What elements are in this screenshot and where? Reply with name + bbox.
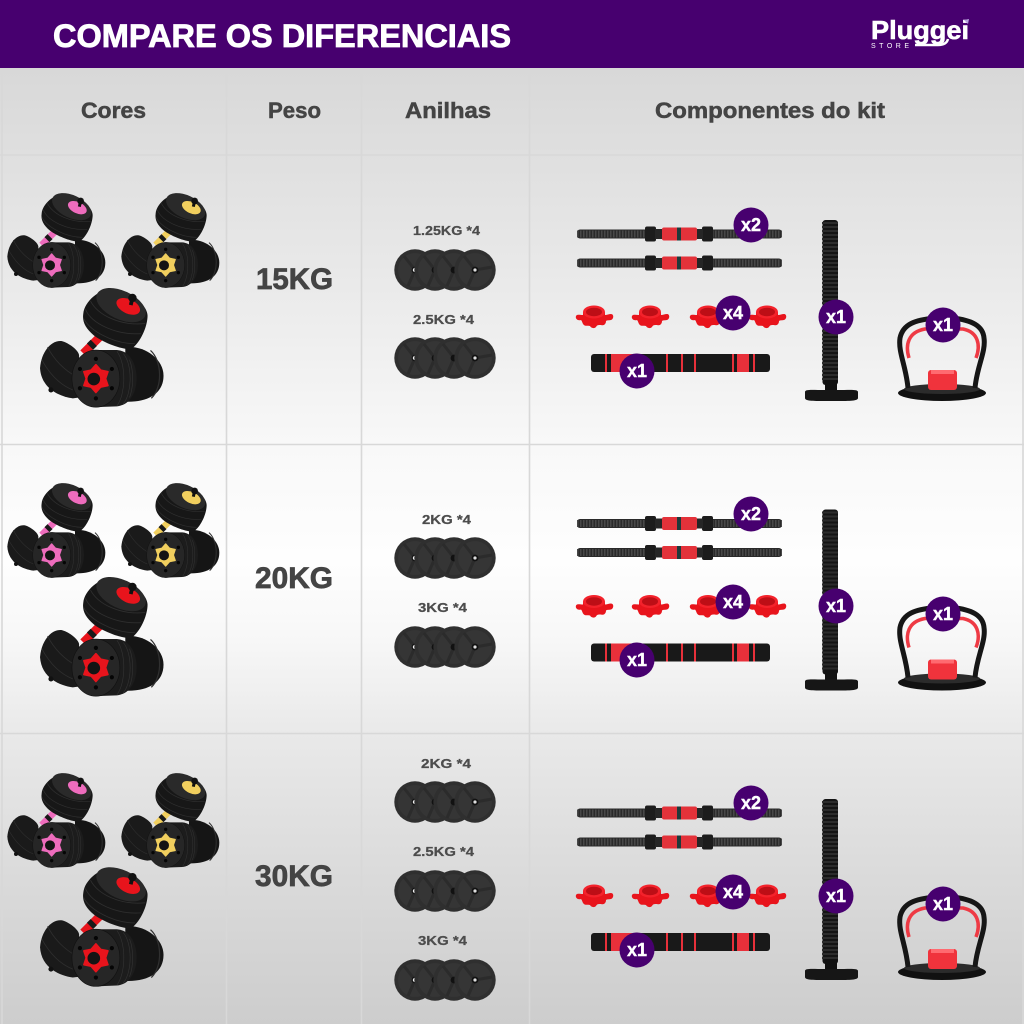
weight 30KG: 30KG bbox=[255, 860, 333, 893]
weight 15KG: 15KG bbox=[256, 263, 333, 296]
label 2KG: 2KG *4 bbox=[421, 756, 472, 771]
badge x2: x2 bbox=[741, 793, 761, 813]
label 2KG: 2KG *4 bbox=[422, 512, 472, 527]
badge x1 kettlebell bbox=[926, 308, 960, 342]
badge x1 pole bbox=[818, 300, 854, 334]
badge x2: x2 bbox=[741, 504, 761, 524]
dumbbell colours 15KG bbox=[7, 188, 219, 407]
badge x4 bbox=[716, 874, 750, 910]
badge x1 kettlebell: x1 bbox=[933, 604, 953, 624]
heading: Anilhas: Anilhas bbox=[405, 98, 491, 123]
dumbbell colours 20KG bbox=[7, 478, 219, 696]
badge x4: x4 bbox=[723, 303, 743, 323]
badge x2 bbox=[734, 208, 768, 242]
badge x4 bbox=[716, 296, 750, 330]
dumbbell colours 30KG bbox=[7, 768, 219, 986]
label 2.5KG: 2.5KG *4 bbox=[413, 312, 475, 327]
title: COMPARE OS DIFERENCIAIS bbox=[53, 18, 511, 54]
label 3KG: 3KG *4 bbox=[418, 933, 468, 948]
badge x1 handle: x1 bbox=[627, 940, 647, 960]
weight 20KG: 20KG bbox=[255, 562, 333, 595]
badge x1 pole bbox=[818, 878, 854, 914]
badge x1 kettlebell: x1 bbox=[933, 894, 953, 914]
plates 30KG bbox=[394, 756, 496, 1001]
badge x1 handle bbox=[620, 354, 654, 388]
logo: Pluggei Store: Pluggei bbox=[871, 15, 969, 45]
label 1.25KG: 1.25KG *4 bbox=[413, 223, 481, 238]
label 3KG: 3KG *4 bbox=[418, 600, 468, 615]
badge x1 handle: x1 bbox=[627, 361, 647, 381]
badge x4: x4 bbox=[723, 592, 743, 612]
column headings bbox=[81, 98, 886, 123]
badge x1 pole: x1 bbox=[826, 886, 846, 906]
badge x1 pole: x1 bbox=[826, 307, 846, 327]
logo: Pluggei Store: STORE bbox=[871, 43, 911, 50]
badge x1 kettlebell bbox=[926, 886, 960, 922]
badge x4: x4 bbox=[723, 882, 743, 902]
kit components 30KG bbox=[576, 786, 986, 980]
badge x1 pole: x1 bbox=[826, 596, 846, 616]
heading: Componentes do kit: Componentes do kit bbox=[655, 98, 886, 123]
badge x1 handle: x1 bbox=[627, 650, 647, 670]
row: 20KG bbox=[7, 478, 986, 696]
badge x2 bbox=[734, 786, 768, 820]
label 2.5KG: 2.5KG *4 bbox=[413, 844, 475, 859]
badge x2: x2 bbox=[741, 215, 761, 235]
badge x4 bbox=[716, 584, 750, 620]
row: 30KG bbox=[7, 756, 986, 1001]
plates 20KG bbox=[394, 512, 496, 668]
row: 15KG bbox=[7, 188, 986, 407]
badge x1 handle bbox=[620, 932, 654, 968]
badge x2 bbox=[734, 496, 768, 532]
heading: Peso: Peso bbox=[268, 98, 321, 123]
kit components 20KG bbox=[576, 496, 986, 690]
header bar bbox=[0, 0, 1024, 68]
plates 15KG bbox=[394, 223, 496, 379]
badge x1 pole bbox=[818, 588, 854, 624]
badge x1 handle bbox=[620, 642, 654, 678]
badge x1 kettlebell bbox=[926, 596, 960, 632]
heading: Cores: Cores bbox=[81, 98, 146, 123]
kit components 15KG bbox=[576, 208, 986, 401]
badge x1 kettlebell: x1 bbox=[933, 315, 953, 335]
